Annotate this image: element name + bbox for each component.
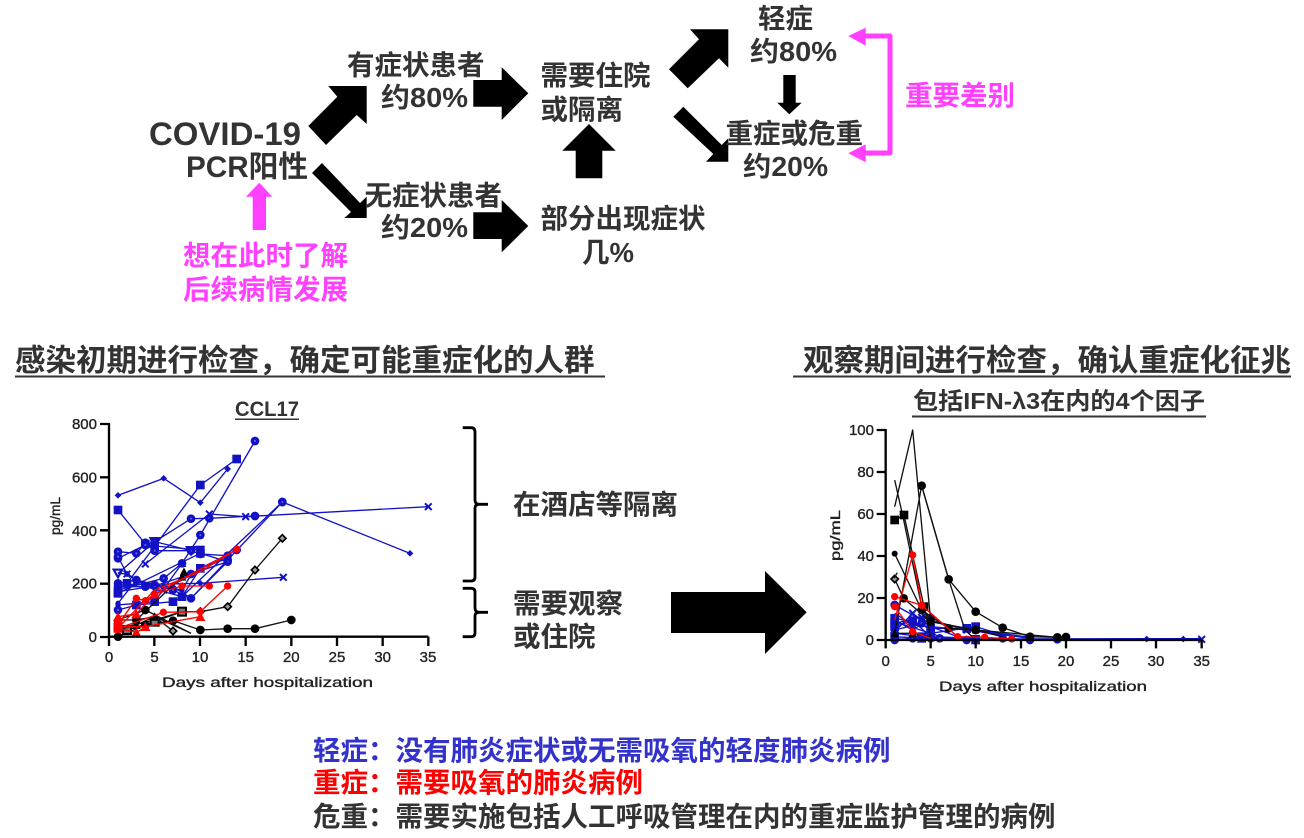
chart 2 axis labels	[827, 422, 1210, 694]
arrow: asymptomatic to some symptoms	[473, 200, 528, 252]
label: isolate in hotel: 在酒店等隔离	[513, 489, 678, 520]
flow: COVID-19 PCR positive	[149, 116, 308, 184]
chart 1 axis labels: 25	[329, 649, 345, 666]
chart 1 axis labels: 400	[72, 523, 97, 540]
flow: asymptomatic patients: 约20%	[381, 212, 468, 243]
chart 1 axis labels: Days after hospitalization	[162, 674, 373, 690]
callout: want to know the later course: 想在此时了解	[183, 240, 348, 271]
label: observation or hospitalisation	[513, 588, 623, 652]
axes	[100, 423, 428, 646]
flow: severe or critical	[726, 118, 863, 182]
arrow: positive to asymptomatic	[312, 163, 367, 218]
flow: hospitalisation or isolation	[540, 60, 650, 125]
flow: COVID-19 PCR positive: PCR阳性	[186, 151, 308, 184]
callout: want to know the later course: 后续病情发展	[183, 274, 348, 305]
legend: definitions	[313, 735, 1056, 832]
chart 1 axis labels: 600	[72, 470, 97, 486]
arrow: mild to severe	[777, 75, 802, 114]
legend: critical: 危重：需要实施包括人工呼吸管理在内的重症监护管理的病例	[313, 801, 1056, 832]
chart 2 axis labels: pg/mL	[827, 510, 843, 561]
axes	[877, 429, 1202, 648]
arrow: hospitalisation to severe	[673, 107, 728, 162]
chart 1 axis labels: 5	[150, 649, 159, 666]
label: observation or hospitalisation: 需要观察	[513, 588, 623, 619]
flow: mild: 轻症	[758, 3, 813, 34]
flow: hospitalisation or isolation: 或隔离	[540, 94, 623, 125]
chart 1 axis labels: 0	[105, 649, 113, 666]
flow: severe or critical: 约20%	[743, 151, 828, 182]
flow: some develop symptoms	[540, 203, 706, 268]
flow: symptomatic patients: 约80%	[381, 82, 468, 113]
flow: COVID-19 PCR positive: COVID-19	[149, 116, 301, 152]
chart 2 axis labels: 30	[1148, 653, 1164, 670]
data series: critical (black)	[892, 430, 1066, 640]
bracket: isolation group	[463, 428, 488, 581]
arrow: symptomatic to hospitalisation	[473, 67, 528, 120]
arrow: pink pointer to PCR positive	[246, 183, 272, 230]
chart 2 axis labels: 20	[1058, 653, 1074, 670]
data series: mild (blue)	[118, 441, 428, 610]
chart 1 axis labels: 35	[420, 649, 436, 666]
chart 2 axis labels: 0	[882, 653, 890, 670]
arrow: some symptoms up to hospitalisation	[562, 124, 616, 178]
line chart: CCL17	[100, 423, 428, 646]
chart 2 axis labels: Days after hospitalization	[939, 678, 1147, 694]
arrow: positive to symptomatic	[308, 86, 367, 145]
chart 2 axis labels: 0	[866, 632, 874, 649]
data series: mild (blue)	[895, 605, 1202, 640]
legend: mild: 轻症：没有肺炎症状或无需吸氧的轻度肺炎病例	[313, 735, 890, 766]
chart 2 axis labels: 60	[857, 506, 874, 523]
chart 2 axis labels: 15	[1013, 653, 1029, 670]
bracket: observation group	[463, 588, 488, 637]
chart 1 axis labels: 15	[237, 649, 254, 666]
label: observation or hospitalisation: 或住院	[513, 621, 596, 652]
flow: severe or critical: 重症或危重	[726, 118, 863, 149]
flow: some develop symptoms: 部分出现症状	[540, 203, 706, 234]
chart 1 axis labels: 0	[89, 629, 97, 646]
chart 1 axis labels: 800	[72, 416, 97, 433]
data series: critical (black)	[118, 538, 291, 637]
flow: mild: 约80%	[750, 36, 837, 67]
callout: want to know the later course	[183, 240, 348, 305]
legend: severe: 重症：需要吸氧的肺炎病例	[313, 767, 643, 798]
heading: left section: 感染初期进行检查，确定可能重症化的人群	[15, 344, 594, 378]
chart 2 axis labels: 25	[1103, 653, 1119, 670]
chart 1 axis labels	[47, 416, 436, 690]
flow: asymptomatic patients	[364, 180, 502, 243]
flow: hospitalisation or isolation: 需要住院	[540, 60, 650, 91]
chart 1 axis labels: 200	[72, 576, 97, 592]
flow: symptomatic patients: 有症状患者	[347, 50, 484, 80]
arrow: big arrow between charts	[671, 571, 807, 654]
chart 2 axis labels: 10	[967, 653, 984, 670]
chart 1 axis labels: pg/mL	[47, 497, 63, 535]
chart 2 axis labels: 80	[857, 464, 874, 481]
chart 2 axis labels: 40	[857, 548, 874, 565]
arrow: hospitalisation to mild	[669, 29, 728, 88]
chart 1 axis labels: 30	[374, 649, 391, 666]
flow: mild	[750, 3, 837, 67]
flow: symptomatic patients	[347, 50, 484, 113]
arrow: pink double-headed bracket	[848, 28, 890, 162]
data series: severe (red)	[895, 555, 1012, 639]
chart 2 axis labels: 35	[1193, 653, 1210, 670]
chart 1 axis labels: 20	[283, 649, 300, 666]
chart 2 axis labels: 100	[849, 422, 874, 439]
sub-heading: four factors: 包括IFN-λ3在内的4个因子	[913, 388, 1205, 414]
callout: important difference: 重要差别	[905, 80, 1015, 111]
flow: asymptomatic patients: 无症状患者	[364, 180, 502, 211]
chart 1 axis labels: 10	[192, 649, 208, 666]
chart 2 axis labels: 20	[857, 590, 874, 607]
line chart: IFN-lambda3	[877, 429, 1202, 648]
flow: some develop symptoms: 几%	[582, 237, 634, 268]
chart 2 axis labels: 5	[927, 653, 935, 670]
data series: severe (red)	[118, 549, 237, 632]
chart title: CCL17: CCL17	[235, 398, 299, 421]
heading: right section: 观察期间进行检查，确认重症化征兆	[803, 344, 1291, 378]
